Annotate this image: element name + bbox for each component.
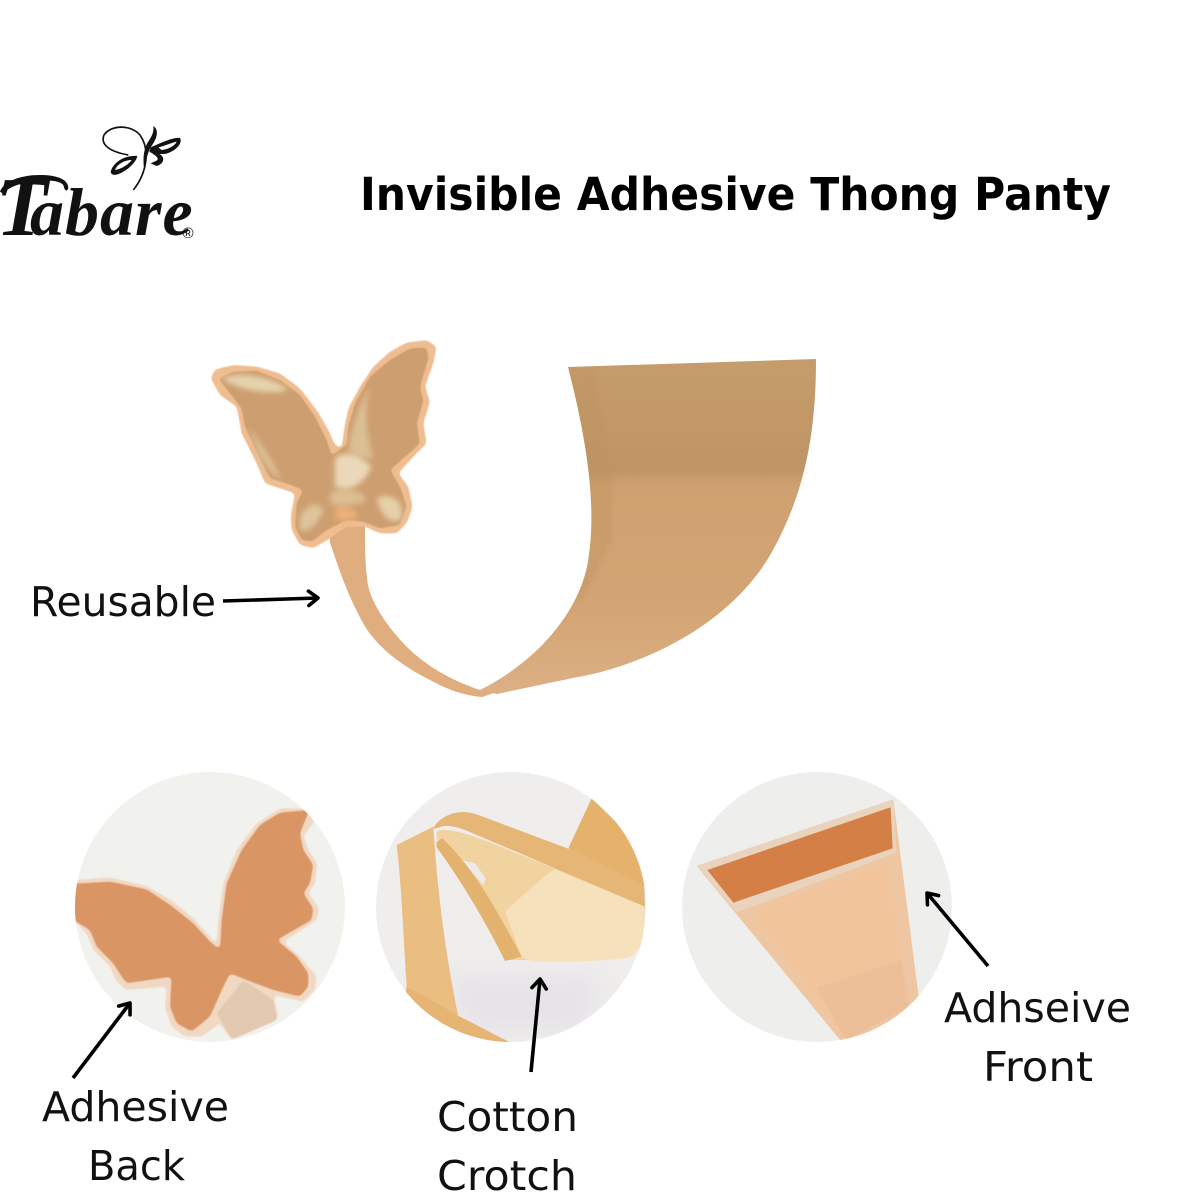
arrow: Reusable: [223, 598, 318, 601]
wing adhesive: [70, 810, 313, 1032]
label: Cotton Crotch: [437, 1093, 578, 1200]
label: Adhseive Front: [944, 984, 1131, 1091]
icon: logo butterfly: [103, 126, 181, 190]
label: Adhseive Front: Adhseive: [944, 984, 1131, 1032]
circle: cotton crotch: [376, 772, 655, 1043]
butterfly inner: [218, 347, 428, 542]
label: Reusable: Reusable: [30, 578, 216, 626]
panel side seam: [568, 370, 592, 600]
strap: [328, 515, 497, 697]
label: Adhesive Back: [42, 1083, 229, 1190]
arrow: Cotton Crotch: [531, 979, 540, 1072]
circle background: [682, 772, 952, 1042]
fabric bands and cotton lining: [395, 798, 655, 1043]
butterfly back patch: [211, 340, 437, 548]
logo T swash: [0, 175, 68, 194]
wing rim: [70, 808, 319, 1040]
product image: adhesive thong with butterfly back: [211, 340, 816, 697]
circle background: [376, 772, 646, 1042]
logo wordmark: abare: [30, 174, 194, 250]
front panel with adhesive strip: [697, 799, 920, 1060]
label: Cotton Crotch: Cotton: [437, 1093, 578, 1141]
fabric tab: [217, 980, 277, 1039]
circle background: [75, 772, 345, 1042]
label: Adhesive Back: Adhesive: [42, 1083, 229, 1131]
arrow: Adhseive Front: [927, 893, 988, 966]
logo: Tabare with butterfly: [0, 126, 194, 254]
butterfly rim: [211, 340, 437, 548]
label: Cotton Crotch: Crotch: [437, 1152, 577, 1200]
circle: adhesive back: [70, 772, 345, 1042]
front panel: [480, 359, 816, 694]
label: Adhseive Front: Front: [983, 1043, 1093, 1091]
circle: adhesive front: [682, 772, 952, 1060]
title: Invisible Adhesive Thong Panty: [360, 168, 1111, 221]
label: Adhesive Back: Back: [88, 1142, 185, 1190]
butterfly highlights: [222, 375, 402, 531]
registered mark: ®: [182, 225, 194, 242]
arrow: Adhesive Back: [73, 1003, 130, 1078]
butterfly adhesive wings: [70, 808, 319, 1040]
